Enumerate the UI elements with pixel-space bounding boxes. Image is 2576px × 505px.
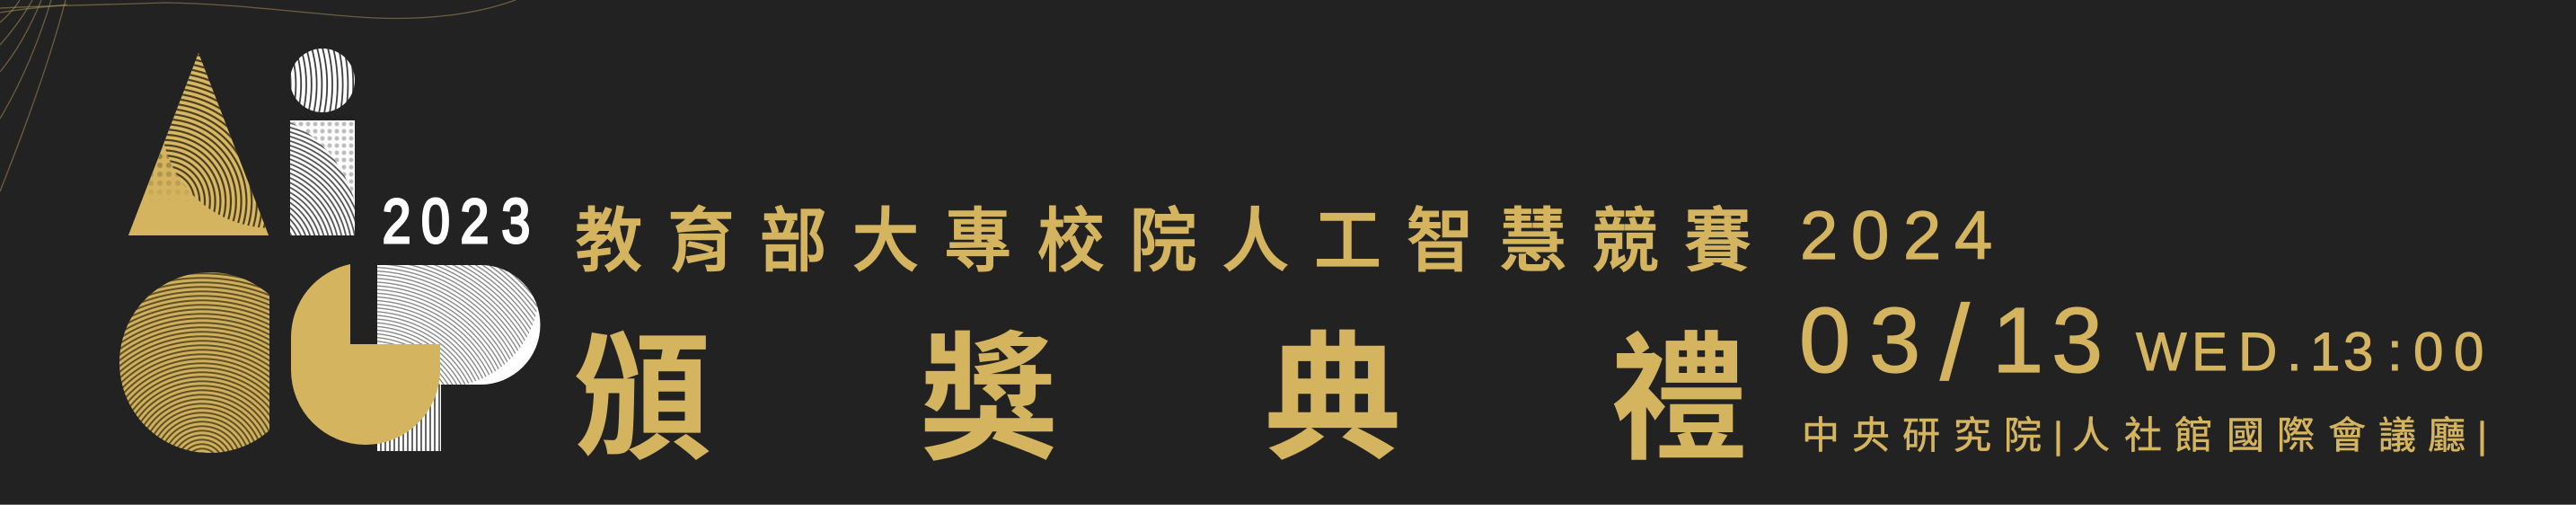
- logo letter P: white hatched shape: [377, 265, 541, 451]
- logo letter G: solid gold shape: [291, 264, 440, 445]
- decorative thin curves, top left: [0, 0, 516, 192]
- logo letter A: hatched triangle: [128, 53, 269, 235]
- weekday and time: WED.13:00: [2136, 322, 2483, 382]
- date 03/13: 03: [1799, 288, 1920, 392]
- logo letter i: dot: [290, 49, 355, 112]
- competition title: 教育部大專校院人工智慧競賽: [575, 203, 1751, 280]
- logo year 2023: 2023: [383, 186, 530, 256]
- date 03/13: 13: [1992, 288, 2103, 392]
- logo letter i: stem: [290, 120, 355, 235]
- logo letter C: hatched circle: [119, 272, 269, 453]
- heading: award ceremony: 頒獎典禮: [574, 323, 1747, 477]
- date 03/13: /: [1940, 284, 1970, 403]
- venue: 中央研究院|人社館國際會議廳|: [1802, 414, 2487, 456]
- year 2024: 2024: [1800, 198, 1992, 274]
